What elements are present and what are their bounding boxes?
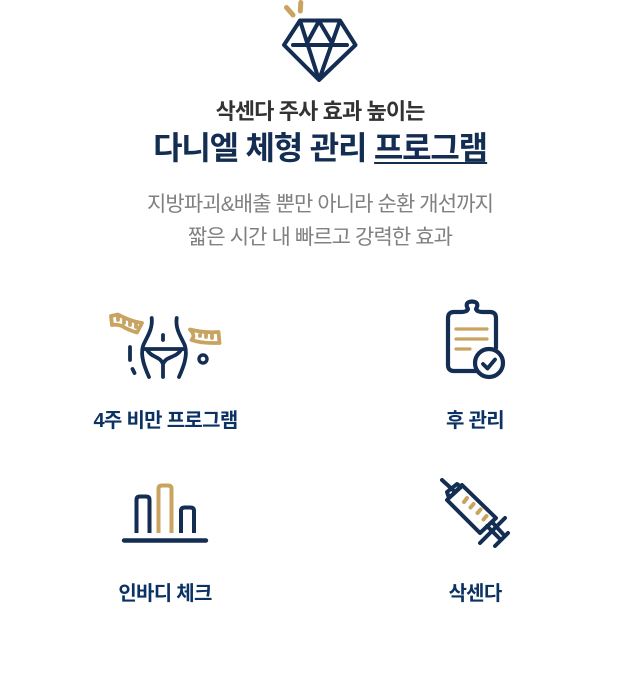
description bbox=[147, 193, 493, 249]
label: aftercare: 후 관리 bbox=[446, 410, 504, 432]
description: 짧은 시간 내 빠르고 강력한 효과 bbox=[188, 226, 452, 249]
label: obesity program: 4주 비만 프로그램 bbox=[93, 410, 238, 432]
title: 다니엘 체형 관리 bbox=[153, 130, 366, 166]
subtitle: 삭센다 주사 효과 높이는 bbox=[215, 99, 425, 124]
title bbox=[153, 130, 488, 166]
label: Saxenda: 삭센다 bbox=[448, 583, 502, 605]
title: 프로그램 bbox=[374, 130, 487, 166]
label: InBody check: 인바디 체크 bbox=[118, 583, 212, 605]
description: 지방파괴&배출 뿐만 아니라 순환 개선까지 bbox=[147, 193, 493, 216]
